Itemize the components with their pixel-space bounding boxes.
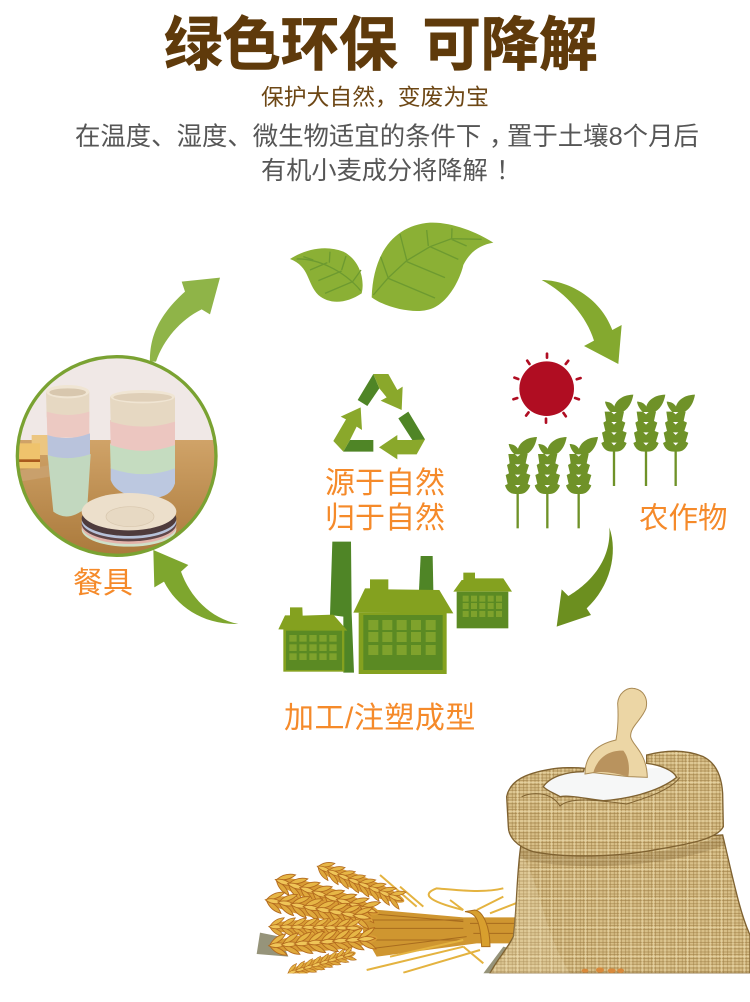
table	[20, 440, 214, 554]
wheat sheaf	[256, 862, 516, 974]
sack body	[490, 835, 750, 973]
label: crops: 农作物	[639, 502, 728, 535]
right building	[453, 573, 512, 628]
subtitle: 保护大自然，变废为宝	[261, 84, 489, 110]
icon: leaves	[290, 223, 493, 311]
left cup stack	[46, 385, 91, 516]
description line 1: 置于土壤8个月后	[507, 123, 699, 151]
plate stack	[82, 493, 176, 547]
arrow: to tableware	[153, 550, 238, 624]
arrow: to leaves	[150, 278, 220, 362]
icon: factory	[278, 542, 512, 674]
arrow: to crops	[542, 280, 622, 364]
label: from nature, back to nature: 源于自然	[325, 467, 445, 500]
large leaf	[372, 223, 493, 311]
description line 1: ，	[489, 123, 514, 151]
spilled grains	[582, 967, 624, 973]
chimneys	[330, 542, 433, 673]
small leaf	[290, 248, 363, 302]
middle building	[353, 579, 453, 674]
wheat plants	[505, 395, 695, 528]
title: 绿色环保	[164, 13, 398, 78]
sun	[513, 354, 581, 423]
wall	[20, 358, 213, 440]
description line 2: 有机小麦成分将降解	[261, 157, 488, 185]
label: from nature, back to nature: 归于自然	[325, 502, 445, 535]
photo: tableware in circle	[13, 353, 220, 560]
description line 1: 在温度、湿度、微生物适宜的条件下	[75, 123, 481, 151]
scoop	[585, 688, 647, 777]
sack collar	[507, 751, 723, 856]
left building	[278, 607, 347, 672]
label: processing: 加工/注塑成型	[284, 702, 476, 735]
header text block	[75, 13, 699, 185]
description line 2: ！	[496, 157, 521, 185]
icon: recycling	[333, 374, 425, 459]
label: tableware: 餐具	[73, 567, 133, 600]
title: 可降解	[422, 13, 598, 78]
arrow: to factory	[557, 527, 613, 627]
flour	[544, 768, 675, 800]
label: from nature, back to nature	[325, 467, 445, 535]
circle frame	[17, 357, 216, 555]
icon: sun and crops	[505, 354, 695, 528]
right bowl stack	[110, 390, 175, 498]
illustration: wheat and flour sack	[257, 688, 750, 980]
cakes	[19, 435, 50, 481]
